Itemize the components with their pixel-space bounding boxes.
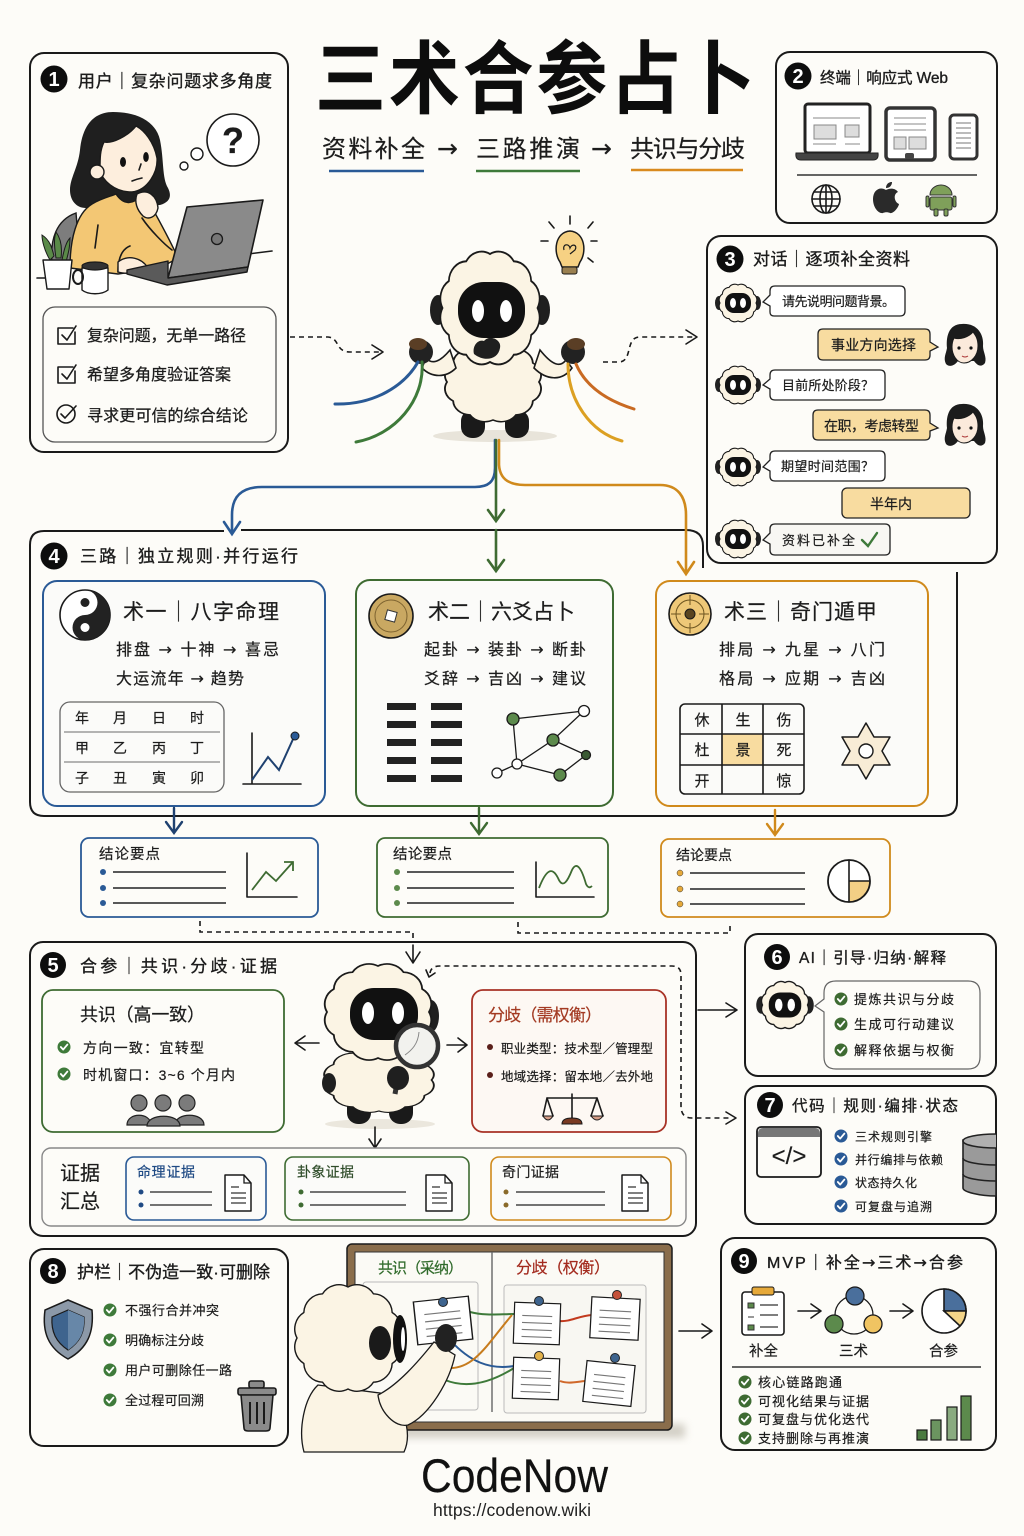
panel 3: dialogue <box>707 236 997 563</box>
badge 7 <box>757 1092 783 1118</box>
chat: complete <box>715 520 890 558</box>
sticky notes <box>413 1290 640 1406</box>
arrow: mascot to dialogue <box>603 330 697 362</box>
arrow: route three to conclusion <box>767 810 783 835</box>
card: hexagram evidence: 卦象证据 <box>297 1164 354 1180</box>
arrow: to consensus <box>295 1036 319 1050</box>
panel 1: user <box>30 53 288 452</box>
arrow: to divergence <box>447 1038 467 1052</box>
chart: trend line <box>243 732 301 784</box>
title: 三术合参占卜 <box>315 35 755 124</box>
heading 9: MVP｜补全→三术→合参 <box>767 1253 963 1272</box>
strings between notes <box>445 1312 592 1384</box>
chat: bot question 1: 请先说明问题背景。 <box>782 294 895 309</box>
icon: code window <box>757 1127 821 1177</box>
chat: user answer 2: 在职，考虑转型 <box>824 418 919 434</box>
mascot: sheep pinning notes <box>295 1285 457 1452</box>
heading: route one: 术一｜八字命理 <box>123 601 279 624</box>
grid: nine palaces: 开 <box>694 773 710 790</box>
panel: consensus: 共识（高一致） <box>80 1005 205 1025</box>
bubble: AI tasks <box>815 981 980 1069</box>
panel 6: AI <box>745 934 996 1076</box>
table: four pillars: 寅 <box>152 770 166 786</box>
table: four pillars: 子 <box>75 770 89 786</box>
badge 1: 1 <box>48 69 60 91</box>
badge 5 <box>40 952 66 978</box>
list: MVP goals: 可视化结果与证据 <box>758 1394 869 1409</box>
table: four pillars: 年 <box>75 710 89 726</box>
subtitle pipeline <box>322 134 745 171</box>
panel: divergence <box>472 990 666 1132</box>
icon: database <box>963 1134 996 1196</box>
icon: network graph <box>492 706 590 781</box>
labels: MVP steps: 三术 <box>839 1343 868 1360</box>
panel: evidence summary: 证据 <box>60 1162 100 1185</box>
chart: rising arrow <box>247 853 297 897</box>
arrow: dashed loop from code to synthesis <box>426 966 736 1124</box>
subtitle pipeline: 共识与分歧 <box>630 136 745 163</box>
arrow: step one to step two <box>798 1304 821 1318</box>
illustration: thinking woman at laptop: ? <box>222 120 244 161</box>
arrow: user to mascot <box>290 337 383 359</box>
panel 4: three routes frame <box>30 530 957 816</box>
heading 2: 终端｜响应式 Web <box>820 68 948 87</box>
list: MVP goals <box>738 1375 869 1446</box>
icon: coin <box>369 594 413 638</box>
subtitle pipeline: → <box>591 134 612 163</box>
cable: blue <box>335 362 418 404</box>
icon: sheep head <box>756 982 814 1028</box>
card: qimen evidence <box>491 1157 671 1220</box>
steps: route three: 格局 → 应期 → 吉凶 <box>719 669 885 688</box>
labels: MVP steps <box>749 1342 958 1360</box>
grid: nine palaces: 伤 <box>776 712 792 729</box>
badge 8: 8 <box>47 1261 59 1283</box>
panel: conclusion blue <box>81 838 318 917</box>
list: guardrails: 明确标注分歧 <box>125 1333 204 1348</box>
card: qimen evidence: 奇门证据 <box>502 1164 559 1180</box>
arrow: route one to conclusion <box>166 808 182 833</box>
chat: user answer 1 <box>818 324 986 366</box>
panel: route one, BaZi <box>43 581 325 806</box>
list: guardrails <box>104 1303 232 1408</box>
checklist box <box>43 307 276 442</box>
arrow: synthesis to AI <box>698 1003 737 1017</box>
badge 4 <box>40 542 68 570</box>
grid: nine palaces: 休 <box>694 712 710 729</box>
list: guardrails: 全过程可回溯 <box>125 1393 204 1408</box>
panel: divergence: 地域选择：留本地／去外地 <box>501 1070 653 1084</box>
list: MVP goals: 核心链路跑通 <box>758 1375 842 1390</box>
table: four pillars: 乙 <box>113 740 127 756</box>
grid: nine palaces: 景 <box>735 742 751 759</box>
icon: globe <box>812 185 840 213</box>
chat: user answer 3: 半年内 <box>870 496 912 512</box>
list: code features <box>834 1129 943 1214</box>
table: four pillars: 卯 <box>190 770 204 786</box>
icon: apple <box>873 182 899 213</box>
grid: nine palaces <box>680 704 804 794</box>
board heading: divergence: 分歧（权衡） <box>516 1259 610 1277</box>
grid: nine palaces: 杜 <box>694 742 710 759</box>
grid: nine palaces: 惊 <box>776 773 792 790</box>
chart: wave <box>536 862 594 897</box>
list: code features: 并行编排与依赖 <box>855 1152 943 1167</box>
cable: green <box>356 362 422 442</box>
steps: route three: 排局 → 九星 → 八门 <box>719 640 885 659</box>
icon: three nodes <box>825 1287 882 1334</box>
steps: route three <box>719 640 885 688</box>
table: four pillars: 日 <box>152 710 166 726</box>
table: four pillars: 丙 <box>152 740 166 756</box>
cable: amber <box>568 364 622 441</box>
chat: bot question 2 <box>715 366 885 404</box>
icon: clipboard <box>742 1287 784 1335</box>
arrow: dashed merge into sheep <box>406 945 420 963</box>
labels: MVP steps: 补全 <box>749 1342 778 1360</box>
chat: bot question 2: 目前所处阶段？ <box>782 378 874 393</box>
list: code features: 三术规则引擎 <box>855 1129 932 1144</box>
subtitle pipeline: → <box>437 134 458 163</box>
heading 8: 护栏｜不伪造一致·可删除 <box>77 1263 270 1282</box>
list: guardrails: 用户可删除任一路 <box>125 1363 232 1378</box>
badge 1 <box>40 66 68 92</box>
badge 7: 7 <box>764 1095 776 1117</box>
chart: quarter pie <box>828 860 870 902</box>
arrow: route two to conclusion <box>471 808 487 834</box>
icon: balance scale <box>543 1094 603 1124</box>
heading: route two: 术二｜六爻占卜 <box>428 601 575 624</box>
logo: CodeNow: CodeNow <box>421 1449 609 1502</box>
bubble: AI tasks: 提炼共识与分歧 <box>854 992 954 1007</box>
arrow: blue flow to route one <box>224 440 495 534</box>
arrow: board to MVP <box>679 1324 712 1338</box>
icon: six-point star <box>842 723 890 779</box>
icon: trash can <box>238 1381 276 1431</box>
table: four pillars <box>60 702 224 792</box>
illustration: thinking woman at laptop <box>37 112 272 294</box>
table: four pillars: 时 <box>190 710 204 726</box>
panel 5: synthesis <box>30 942 696 1236</box>
chat: bot question 3 <box>715 448 885 486</box>
checklist box: 希望多角度验证答案 <box>87 366 231 384</box>
panel: consensus: 方向一致：宜转型 <box>83 1040 204 1056</box>
card: destiny evidence: 命理证据 <box>137 1164 195 1180</box>
panel: consensus: 时机窗口：3~6 个月内 <box>83 1067 235 1083</box>
chat: bot question 3: 期望时间范围？ <box>781 459 874 474</box>
panel: conclusion green <box>377 838 608 917</box>
steps: route one: 大运流年 → 趋势 <box>116 669 244 688</box>
icon: yin yang <box>60 590 110 640</box>
steps: route one: 排盘 → 十神 → 喜忌 <box>116 640 279 659</box>
badge 4: 4 <box>48 546 60 568</box>
list: guardrails: 不强行合并冲突 <box>125 1303 219 1318</box>
icon: light bulb <box>541 216 597 274</box>
panel: divergence: 职业类型：技术型／管理型 <box>501 1041 653 1056</box>
panel: route three, Qimen <box>656 581 928 806</box>
arrow: green flow to route two <box>488 440 504 571</box>
chat: user answer 3 <box>842 488 970 518</box>
card: destiny evidence <box>126 1157 266 1220</box>
board heading: consensus: 共识（采纳） <box>378 1260 463 1277</box>
badge 3: 3 <box>724 249 736 271</box>
panel: evidence summary <box>42 1148 686 1226</box>
chat: user answer 2 <box>813 404 986 446</box>
list: code features: 可复盘与追溯 <box>855 1199 932 1214</box>
steps: route two: 起卦 → 装卦 → 断卦 <box>424 640 586 659</box>
icon: compass disc <box>669 593 711 635</box>
heading 7: 代码｜规则·编排·状态 <box>792 1097 958 1115</box>
checklist box: 复杂问题，无单一路径 <box>87 327 246 345</box>
bubble: AI tasks: 生成可行动建议 <box>854 1017 954 1032</box>
icon: hexagram bars <box>387 703 462 782</box>
panel 2: terminals <box>776 52 997 223</box>
mascot: sheep with magnifier <box>322 964 439 1129</box>
panel 8: guardrails <box>30 1249 288 1446</box>
heading: route three: 术三｜奇门遁甲 <box>724 601 877 624</box>
table: four pillars: 丑 <box>113 770 127 786</box>
panel: conclusion amber <box>661 839 890 917</box>
list: code features: 状态持久化 <box>855 1175 917 1190</box>
badge 2: 2 <box>792 66 804 88</box>
steps: route one <box>116 640 279 688</box>
icon: code window: </> <box>772 1143 806 1170</box>
badge 6 <box>764 944 790 970</box>
badge 9 <box>731 1248 757 1274</box>
grid: nine palaces: 死 <box>776 742 792 759</box>
labels: MVP steps: 合参 <box>929 1343 958 1360</box>
steps: route two: 爻辞 → 吉凶 → 建议 <box>424 669 586 688</box>
checklist box: 寻求更可信的综合结论 <box>87 407 248 425</box>
heading 5: 合参｜共识·分歧·证据 <box>80 957 277 976</box>
card: hexagram evidence <box>285 1157 469 1220</box>
panel: conclusion blue: 结论要点 <box>99 846 160 863</box>
icon: phone <box>950 115 977 159</box>
heading 4: 三路｜独立规则·并行运行 <box>80 547 298 566</box>
url: https://codenow.wiki <box>433 1500 591 1520</box>
table: four pillars: 月 <box>113 710 127 726</box>
arrow: amber flow to route three <box>499 440 694 574</box>
badge 2 <box>784 62 812 90</box>
icon: laptop <box>796 104 878 160</box>
panel: evidence summary: 汇总 <box>60 1190 100 1213</box>
badge 3 <box>716 246 744 272</box>
icon: people <box>127 1095 204 1126</box>
badge 9: 9 <box>738 1251 750 1273</box>
panel: conclusion green: 结论要点 <box>393 846 452 863</box>
chart: growth bars <box>917 1396 971 1440</box>
list: MVP goals: 可复盘与优化迭代 <box>758 1412 869 1427</box>
heading 3: 对话｜逐项补全资料 <box>753 250 910 269</box>
panel 9: MVP <box>721 1238 996 1450</box>
chat: bot question 1 <box>715 284 905 322</box>
badge 8 <box>40 1258 66 1284</box>
icon: tablet <box>886 108 935 160</box>
badge 6: 6 <box>771 947 783 969</box>
list: MVP goals: 支持删除与再推演 <box>758 1431 869 1446</box>
grid: nine palaces: 生 <box>735 712 751 729</box>
table: four pillars: 丁 <box>190 740 204 756</box>
panel 7: code <box>745 1086 996 1224</box>
panel: divergence: 分歧（需权衡） <box>488 1006 602 1025</box>
bubble: AI tasks: 解释依据与权衡 <box>854 1043 954 1058</box>
panel: consensus <box>42 990 284 1132</box>
arrow: to evidence <box>369 1127 381 1148</box>
chat: user answer 1: 事业方向选择 <box>831 337 916 353</box>
arrow: conclusions merge into synthesis <box>200 921 730 945</box>
steps: route two <box>424 640 586 688</box>
heading 1: 用户｜复杂问题求多角度 <box>78 72 272 91</box>
chat: complete: 资料已补全 <box>782 533 855 548</box>
cable: red-orange <box>576 364 634 409</box>
badge 5: 5 <box>47 955 59 977</box>
board: consensus and divergence <box>347 1244 685 1438</box>
mascot: central sheep holding cables <box>335 252 634 442</box>
heading 6: AI｜引导·归纳·解释 <box>799 949 946 967</box>
table: four pillars: 甲 <box>75 740 89 756</box>
subtitle pipeline: 资料补全 <box>322 136 425 163</box>
icon: shield <box>44 1300 92 1359</box>
subtitle pipeline: 三路推演 <box>476 136 580 163</box>
icon: pie chart <box>922 1289 966 1333</box>
panel: route two, Liuyao <box>356 580 613 806</box>
arrow: step two to step three <box>890 1304 913 1318</box>
icon: android <box>926 185 956 216</box>
panel: conclusion amber: 结论要点 <box>676 847 732 863</box>
